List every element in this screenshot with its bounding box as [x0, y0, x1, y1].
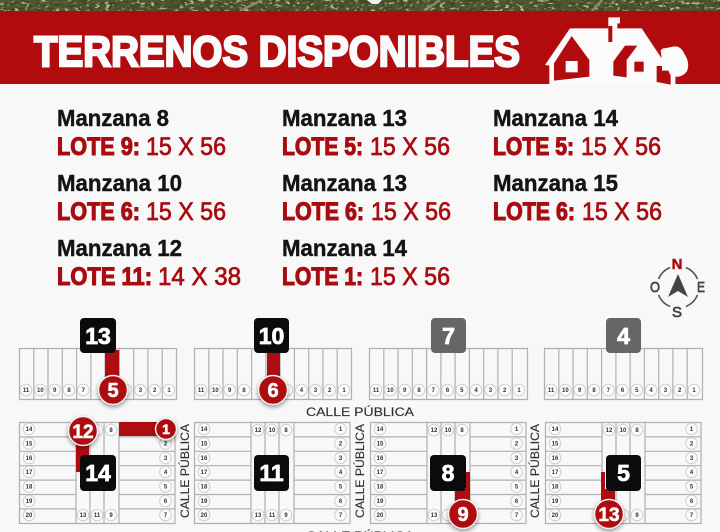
column 1: 14 X 38	[158, 263, 241, 291]
map block 11: 20	[201, 513, 208, 519]
map block 4: 3	[664, 388, 668, 394]
map block 13: 5	[107, 380, 119, 402]
map block 13: 1	[167, 388, 171, 394]
map block 8: 19	[377, 499, 384, 505]
map block 5: 16	[552, 456, 559, 462]
map block 14: 18	[26, 484, 33, 490]
map block 13: 9	[53, 388, 57, 394]
street label: top: CALLE PÚBLICA	[306, 404, 414, 419]
column 2: Manzana 13	[282, 170, 407, 196]
icon: compass: E	[697, 279, 705, 296]
map block 5: 3	[690, 456, 694, 462]
column 2	[282, 105, 451, 291]
map block 11: 1	[339, 427, 343, 433]
map block 7: 7	[432, 388, 436, 394]
street label: side 2: CALLE PÚBLICA	[352, 424, 367, 518]
street label: side 3: CALLE PÚBLICA	[527, 424, 542, 518]
map block 10: 8	[242, 388, 246, 394]
title: TERRENOS DISPONIBLES	[34, 28, 520, 76]
map block 14: 5	[164, 484, 168, 490]
map block 5: 8	[635, 428, 639, 434]
map block 4: 8	[592, 388, 596, 394]
map block 8: 17	[377, 470, 384, 476]
map block 10: 1	[342, 388, 346, 394]
map block 14: 3	[164, 456, 168, 462]
map block 14: 13	[80, 513, 87, 519]
map block 8: 8	[442, 460, 455, 486]
map block 11: 9	[284, 513, 288, 519]
map block 11: 14	[201, 427, 208, 433]
map block 8: 9	[457, 504, 469, 526]
map block 5: 2	[690, 442, 694, 448]
map block 10: 3	[314, 388, 318, 394]
map block 10: 2	[328, 388, 332, 394]
map block 5: 18	[552, 484, 559, 490]
map block 11: 3	[339, 456, 343, 462]
map block 8: 16	[377, 456, 384, 462]
map block 10: 9	[228, 388, 232, 394]
map block 11: 2	[339, 442, 343, 448]
map block 11: 12	[255, 428, 262, 434]
map block 5: 1	[690, 427, 694, 433]
map block 4: 6	[621, 388, 625, 394]
map block 10: 10	[259, 323, 284, 349]
column 3: 15 X 56	[582, 198, 662, 226]
column 1: Manzana 12	[57, 235, 182, 261]
column 1: LOTE 11:	[57, 263, 152, 291]
map block 11: 15	[201, 442, 208, 448]
column 2: LOTE 6:	[282, 198, 364, 226]
map block 8: 18	[377, 484, 384, 490]
map block 14: 12	[72, 422, 94, 443]
map block 11: 13	[255, 513, 262, 519]
map block 14: 2	[164, 442, 168, 448]
map block 14: 14	[26, 427, 33, 433]
map block 7: 6	[446, 388, 450, 394]
map block 5: 14	[552, 427, 559, 433]
map block 14: 11	[94, 513, 101, 519]
map block 11: 10	[269, 428, 276, 434]
map block 7: 11	[373, 388, 380, 394]
map block 5: 17	[552, 470, 559, 476]
map block 8: 20	[377, 513, 384, 519]
map block 11: 4	[339, 470, 343, 476]
map block 11: 16	[201, 456, 208, 462]
map block 4: 7	[607, 388, 611, 394]
map block 8: 12	[431, 428, 438, 434]
map block 5: 10	[620, 428, 627, 434]
map block 14: 15	[26, 442, 33, 448]
map block 7	[370, 318, 528, 400]
map block 5: 20	[552, 513, 559, 519]
map block 11: 11	[269, 513, 276, 519]
map block 14: 17	[26, 470, 33, 476]
map block 14: 6	[164, 499, 168, 505]
map block 5	[545, 422, 701, 528]
map block 5: 5	[617, 460, 630, 486]
map block 11: 18	[201, 484, 208, 490]
map block 7: 3	[489, 388, 493, 394]
map block 8: 6	[515, 499, 519, 505]
map block 4	[544, 318, 702, 400]
map block 11: 7	[339, 513, 343, 519]
column 3: LOTE 6:	[493, 198, 575, 226]
map block 13	[20, 318, 176, 404]
map block 11: 6	[339, 499, 343, 505]
map block 4: 9	[578, 388, 582, 394]
map block 13: 11	[23, 388, 30, 394]
map block 4: 10	[562, 388, 569, 394]
map block 8: 3	[515, 456, 519, 462]
map block 14: 1	[162, 421, 170, 437]
column 1: LOTE 6:	[57, 198, 140, 226]
map block 11: 11	[259, 460, 284, 486]
map block 8: 10	[445, 428, 452, 434]
column 1: 15 X 56	[146, 133, 226, 161]
map block 7: 10	[387, 388, 394, 394]
map block 5: 6	[690, 499, 694, 505]
map block 10: 11	[198, 388, 205, 394]
map block 7: 1	[517, 388, 521, 394]
map block 14: 14	[85, 460, 111, 486]
map block 13: 2	[153, 388, 157, 394]
column 3	[493, 105, 662, 226]
banner	[0, 11, 720, 84]
column 1	[57, 105, 241, 291]
map block 14: 19	[26, 499, 33, 505]
column 2: Manzana 13	[282, 105, 407, 131]
map block 7: 4	[474, 388, 478, 394]
column 3: Manzana 15	[493, 170, 618, 196]
map block 4: 5	[635, 388, 639, 394]
map block 14: 7	[164, 513, 168, 519]
icon: compass: N	[672, 256, 682, 273]
map block 10: 10	[212, 388, 219, 394]
map block 13: 10	[37, 388, 44, 394]
column 3: LOTE 5:	[493, 133, 574, 161]
map block 5: 9	[635, 513, 639, 519]
map block 14: 20	[26, 513, 33, 519]
map block 7: 9	[403, 388, 407, 394]
aerial photo strip	[0, 0, 720, 11]
map block 4: 2	[678, 388, 682, 394]
map block 11	[194, 422, 350, 524]
map block 8: 5	[515, 484, 519, 490]
map block 14: 4	[164, 470, 168, 476]
column 1: Manzana 8	[57, 105, 169, 131]
map block 8: 15	[377, 442, 384, 448]
map block 10: 6	[267, 380, 279, 402]
street label: side 1: CALLE PÚBLICA	[177, 424, 192, 518]
column 2: Manzana 14	[282, 235, 407, 261]
icon: compass: O	[650, 279, 660, 296]
icon: house	[545, 17, 688, 85]
map block 13: 3	[139, 388, 143, 394]
map block 13: 8	[67, 388, 71, 394]
map block 11: 19	[201, 499, 208, 505]
map block 4: 1	[692, 388, 696, 394]
column 2: 15 X 56	[371, 198, 451, 226]
column 1: 15 X 56	[146, 198, 226, 226]
map block 14: 16	[26, 456, 33, 462]
map block 10: 4	[300, 388, 304, 394]
map block 8: 2	[515, 442, 519, 448]
map block 8: 8	[460, 428, 464, 434]
icon: compass: S	[672, 304, 682, 321]
map block 14	[19, 416, 176, 524]
map block 11: 8	[284, 428, 288, 434]
map block 8: 1	[515, 427, 519, 433]
column 2: 15 X 56	[370, 133, 450, 161]
column 1: Manzana 10	[57, 170, 182, 196]
map block 5: 7	[690, 513, 694, 519]
map block 5: 4	[690, 470, 694, 476]
map block 5: 5	[690, 484, 694, 490]
map block 10	[194, 318, 352, 404]
map block 5: 15	[552, 442, 559, 448]
map block 14: 8	[109, 428, 113, 434]
column 3: Manzana 14	[493, 105, 618, 131]
map block 13: 7	[82, 388, 86, 394]
column 2: LOTE 1:	[282, 263, 363, 291]
column 2: LOTE 5:	[282, 133, 363, 161]
map block 5: 12	[606, 428, 613, 434]
column 3: 15 X 56	[581, 133, 661, 161]
map block 14: 9	[109, 513, 113, 519]
map block 8: 7	[515, 513, 519, 519]
map block 8	[370, 422, 526, 528]
icon: compass	[650, 256, 705, 321]
map block 5: 13	[598, 505, 620, 526]
map block 7: 5	[460, 388, 464, 394]
lot list	[57, 105, 662, 291]
map block 4: 4	[649, 388, 653, 394]
map block 11: 5	[339, 484, 343, 490]
map block 7: 7	[442, 323, 455, 349]
map block 13: 13	[85, 323, 111, 349]
map block 8: 4	[515, 470, 519, 476]
map block 11: 17	[201, 470, 208, 476]
map block 7: 8	[417, 388, 421, 394]
map block 4: 4	[617, 323, 630, 349]
map block 8: 14	[377, 427, 384, 433]
map block 7: 2	[503, 388, 507, 394]
map block 4: 11	[548, 388, 555, 394]
column 1: LOTE 9:	[57, 133, 140, 161]
map block 8: 13	[431, 513, 438, 519]
map block 5: 19	[552, 499, 559, 505]
column 2: 15 X 56	[370, 263, 450, 291]
